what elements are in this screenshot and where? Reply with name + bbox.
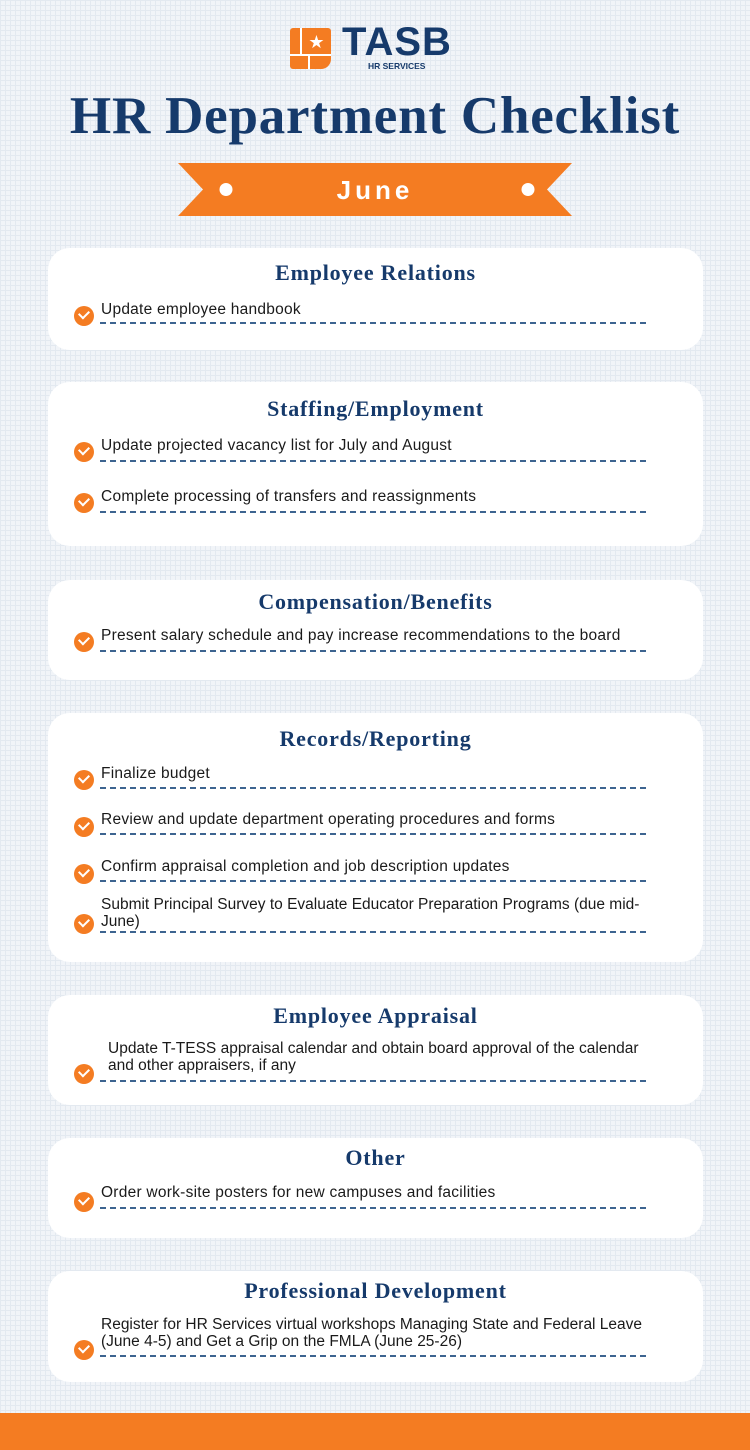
panel: Professional Development: (June 4-5) and Get a Grip on the FMLA (June 25-26) (101, 1333, 462, 1350)
panel: Records/Reporting: Finalize budget (101, 765, 210, 782)
ribbon: June (178, 163, 572, 216)
panel: Employee Relations (48, 248, 703, 350)
item (74, 811, 646, 837)
item (74, 437, 646, 462)
heading: Professional Development (244, 1278, 507, 1303)
panel: Staffing/Employment: Update projected vacancy list for July and August (101, 437, 452, 454)
heading: Other (345, 1145, 406, 1170)
ribbon: June: June (337, 175, 413, 205)
icon: logo mark (290, 28, 331, 69)
item (74, 1184, 646, 1212)
heading: Compensation/Benefits (258, 589, 493, 614)
panel: Employee Relations: Update employee handbook (101, 301, 301, 318)
panel: Staffing/Employment: Complete processing of transfers and reassignments (101, 488, 476, 505)
item (74, 765, 646, 790)
panel: Records/Reporting: Confirm appraisal completion and job description updates (101, 858, 510, 875)
item (74, 301, 646, 326)
heading: Records/Reporting (279, 726, 472, 751)
logo text: TASB (342, 20, 452, 64)
panel: Employee Appraisal: and other appraisers, if any (108, 1057, 296, 1074)
panel: Other (48, 1138, 703, 1238)
panel: Professional Development: Register for HR Services virtual workshops Managing State and Federal Leave (101, 1316, 642, 1333)
heading: Staffing/Employment (267, 396, 484, 421)
item (74, 1316, 646, 1360)
panel: Records/Reporting (48, 713, 703, 962)
panel: Staffing/Employment (48, 382, 703, 546)
logo: HR SERVICES (368, 61, 425, 71)
heading: Employee Appraisal (273, 1003, 478, 1028)
panel: Professional Development (48, 1271, 703, 1382)
panel: Records/Reporting: Submit Principal Survey to Evaluate Educator Preparation Programs (due mid- (101, 896, 639, 913)
footer bar (0, 1413, 750, 1450)
item (74, 488, 646, 513)
panel: Records/Reporting: June) (101, 913, 140, 930)
item (74, 858, 646, 884)
item (74, 896, 646, 934)
item (74, 627, 646, 652)
logo (290, 20, 452, 71)
panel: Records/Reporting: Review and update department operating procedures and forms (101, 811, 555, 828)
heading: Employee Relations (275, 260, 476, 285)
panel: Compensation/Benefits (48, 580, 703, 680)
panel: Compensation/Benefits: Present salary schedule and pay increase recommendations to the board (101, 627, 621, 644)
item (74, 1040, 646, 1084)
icon: logo mark: ★ (308, 32, 325, 52)
panel: Employee Appraisal: Update T-TESS appraisal calendar and obtain board approval of the calendar (108, 1040, 639, 1057)
panel: Other: Order work-site posters for new campuses and facilities (101, 1184, 496, 1201)
panel: Employee Appraisal (48, 995, 703, 1105)
title: HR Department Checklist (70, 87, 680, 145)
